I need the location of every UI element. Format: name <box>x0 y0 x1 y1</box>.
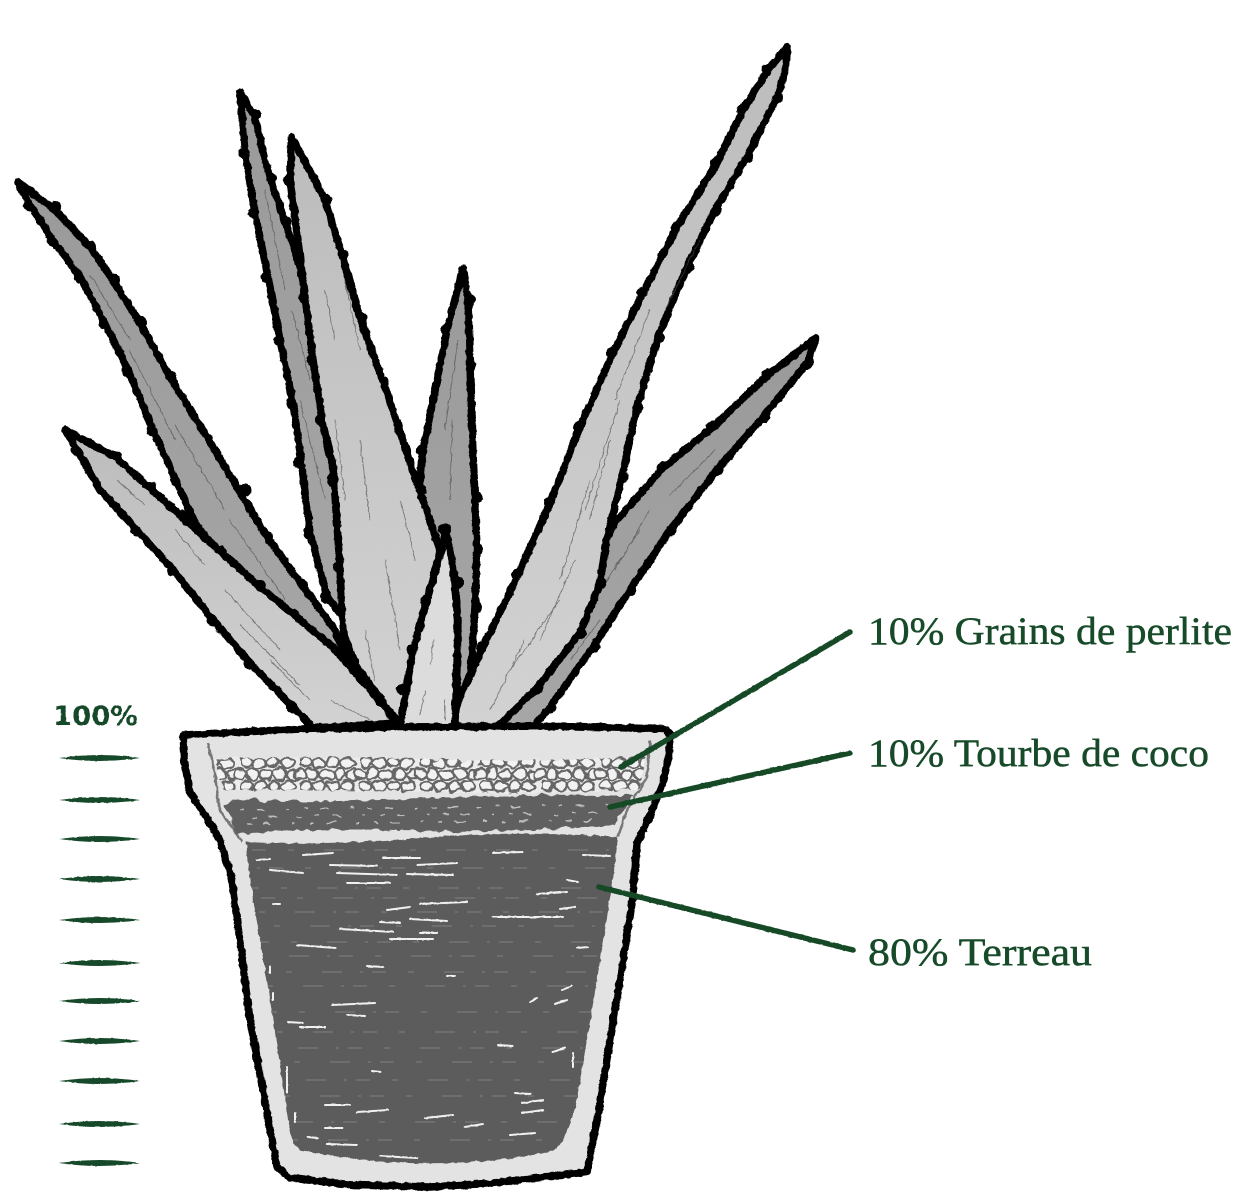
layer: potting soil <box>246 833 618 1164</box>
leaf: large central light <box>290 137 440 722</box>
pot inner wall lines <box>208 740 650 842</box>
leaf: right dark <box>490 338 816 727</box>
leaf: center back dark <box>420 268 477 690</box>
label: coir: 10% Tourbe de coco <box>868 732 1209 775</box>
label: potting soil: 80% Terreau <box>868 931 1092 974</box>
layer: perlite <box>214 754 646 794</box>
leader line: perlite <box>621 632 850 767</box>
leaf: far left dark <box>18 182 350 665</box>
label: perlite: 10% Grains de perlite <box>868 610 1232 653</box>
leader line: potting soil <box>599 887 853 950</box>
pot body <box>183 726 671 1187</box>
pot <box>183 726 671 1187</box>
layer: coir <box>226 797 630 832</box>
leaf: tall back left dark <box>240 92 350 620</box>
scale: 100% label: 100% <box>53 701 138 732</box>
leaf: front center <box>400 530 458 727</box>
leader line: coir <box>610 753 850 807</box>
leaf: large right light <box>455 47 787 727</box>
leaf: lower left light <box>65 430 398 728</box>
scale: tick marks <box>59 755 140 1166</box>
